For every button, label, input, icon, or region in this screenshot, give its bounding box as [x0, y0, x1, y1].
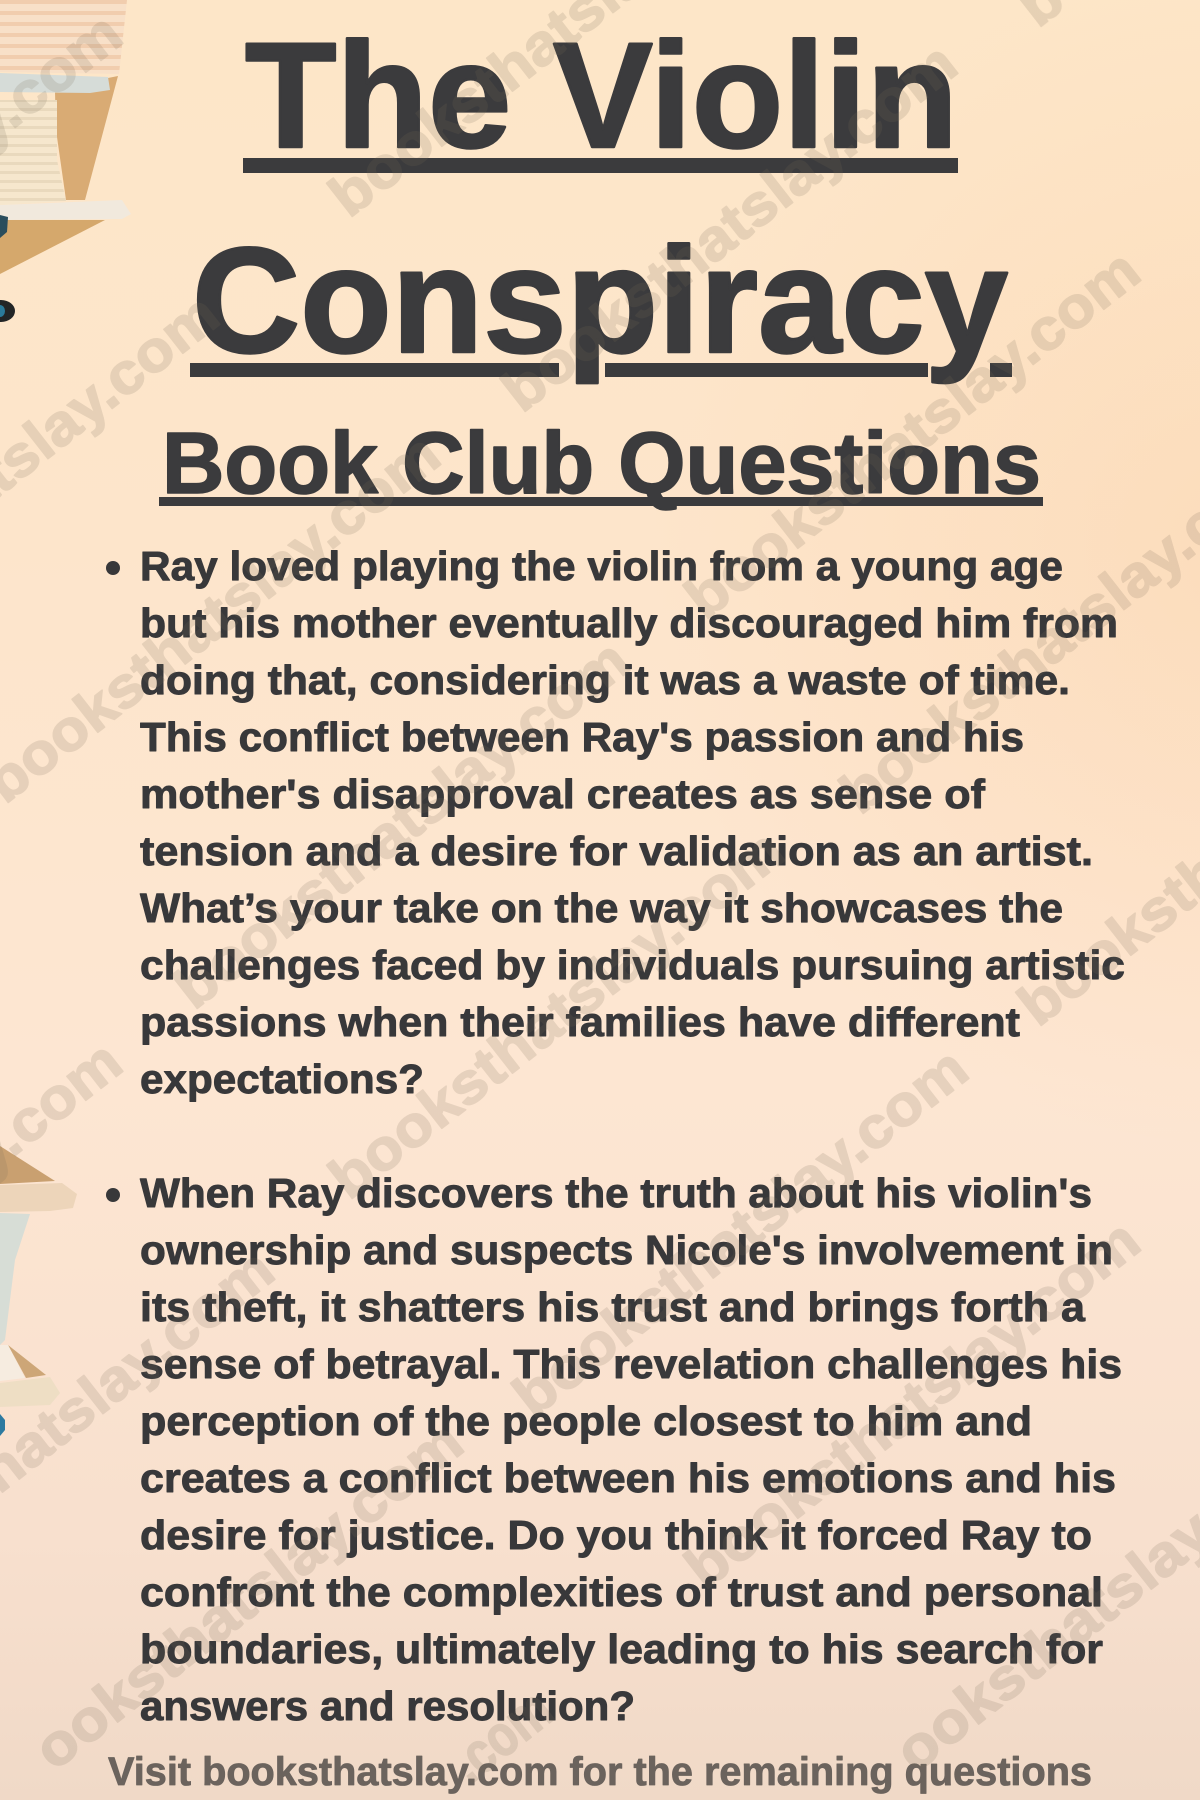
question 2 text block: sense of betrayal. This revelation challenges his — [140, 1341, 1122, 1387]
question 1 text block: challenges faced by individuals pursuing artistic — [140, 942, 1125, 988]
question 2 text block: ownership and suspects Nicole's involvement in — [140, 1227, 1113, 1273]
question 1 text block: passions when their families have different — [140, 999, 1020, 1045]
watermarks: booksthatslay.com — [673, 1207, 1152, 1601]
watermarks: booksthatslay.com — [490, 30, 969, 424]
illustration: stacked books top left — [0, 0, 131, 322]
question 2 text block: When Ray discovers the truth about his violin's — [140, 1170, 1092, 1216]
question 2 text block — [106, 1170, 1122, 1729]
question 2 text block: its theft, it shatters his trust and brings forth a — [140, 1284, 1086, 1330]
question 1 text block: expectations? — [140, 1056, 424, 1102]
question 2 text block: boundaries, ultimately leading to his search for — [140, 1626, 1103, 1672]
watermarks: .com — [438, 1676, 565, 1795]
question 1 text block: This conflict between Ray's passion and his — [140, 714, 1024, 760]
subtitle: Book Club Questions: Book Club Questions — [162, 415, 1041, 512]
question 2 text block: desire for justice. Do you think it forced Ray to — [140, 1512, 1092, 1558]
footer call to action: Visit booksthatslay.com for the remaining questions — [108, 1750, 1092, 1794]
question 2 text block: creates a conflict between his emotions and his — [140, 1455, 1116, 1501]
question 1 text block: mother's disapproval creates as sense of — [140, 771, 985, 817]
bullet 1 — [106, 561, 120, 575]
question 1 text block: but his mother eventually discouraged him from — [140, 600, 1118, 646]
question 1 text block: tension and a desire for validation as an artist. — [140, 828, 1093, 874]
watermarks: booksthatslay.com — [162, 627, 641, 1021]
question 2 text block: confront the complexities of trust and personal — [140, 1569, 1103, 1615]
question 1 text block: Ray loved playing the violin from a young age — [140, 543, 1063, 589]
question 1 text block — [106, 543, 1125, 1102]
question 2 text block: answers and resolution? — [140, 1683, 635, 1729]
watermarks: ooksthatslay.com — [22, 1408, 475, 1782]
watermarks: booksthatslay.com — [673, 237, 1152, 631]
watermarks: booksthatslay.com — [501, 1035, 980, 1429]
question 1 text block: What’s your take on the way it showcases the — [140, 885, 1063, 931]
question 1 text block: doing that, considering it was a waste of time. — [140, 657, 1070, 703]
watermarks: booksthatslay.com — [317, 817, 796, 1211]
bullet 2 — [106, 1188, 120, 1202]
question 2 text block: perception of the people closest to him and — [140, 1398, 1032, 1444]
title: Conspiracy: Conspiracy — [192, 216, 1008, 384]
illustration: stacked books lower left — [0, 1146, 77, 1436]
title: The Violin: The Violin — [245, 11, 958, 179]
